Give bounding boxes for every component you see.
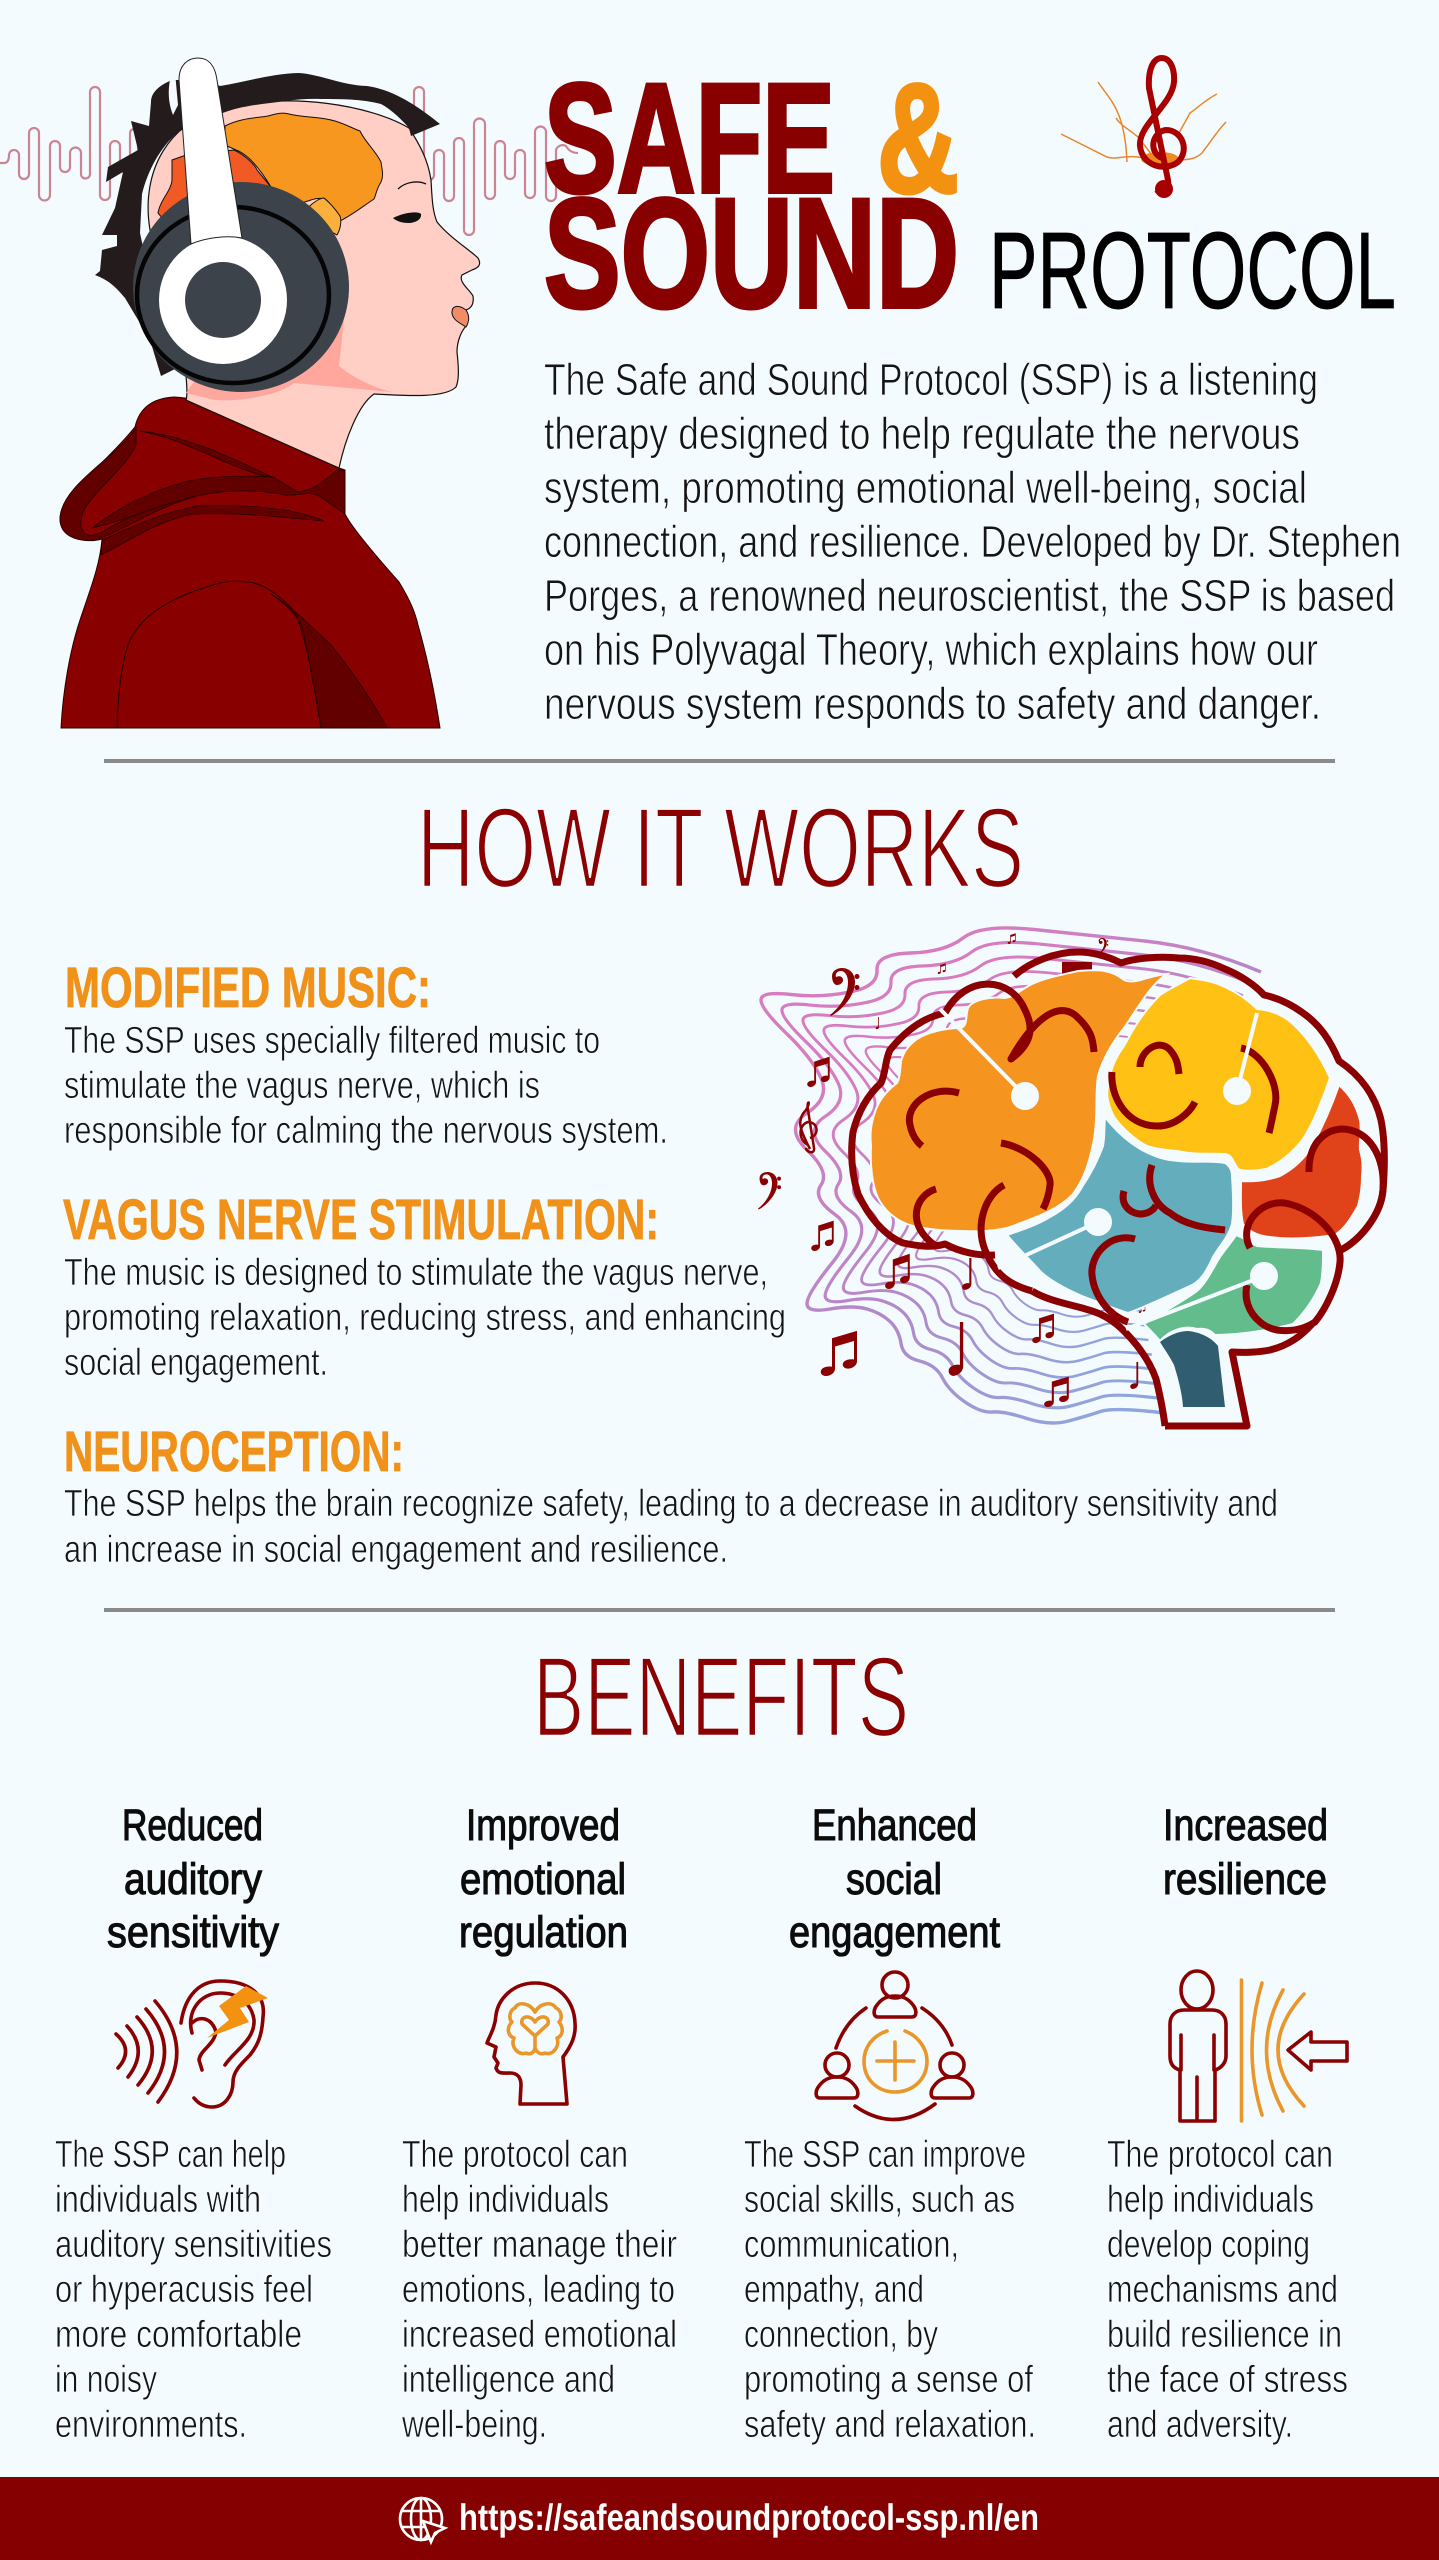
benefit title: sensitivity: [107, 1908, 279, 1957]
icon: treble clef with wires: [1061, 58, 1226, 198]
brain connector nodes: [940, 1009, 1276, 1329]
headband: [179, 58, 242, 244]
brain regions: [871, 970, 1363, 1407]
benefit description: social skills, such as: [744, 2179, 1015, 2221]
text block: vagus nerve stimulation: The music is designed to stimulate the vagus nerve,: [64, 1252, 768, 1294]
benefit description: auditory sensitivities: [55, 2224, 332, 2266]
benefit description: or hyperacusis feel: [55, 2269, 313, 2311]
benefit title: Enhanced: [812, 1801, 977, 1850]
panel: reduced auditory sensitivity: [55, 1801, 332, 2446]
music wave lines: [761, 928, 1261, 1423]
text block: vagus nerve stimulation: [63, 1188, 786, 1384]
text block: modified music: responsible for calming the nervous system.: [64, 1110, 668, 1152]
icon: head with brain and heart: [487, 1983, 575, 2104]
benefit description: [1107, 2134, 1348, 2446]
intro paragraph: [544, 354, 1401, 729]
benefit title: Reduced: [122, 1801, 263, 1850]
text block: modified music: stimulate the vagus nerve, which is: [64, 1065, 540, 1107]
panel: enhanced social engagement: [744, 1801, 1036, 2446]
benefit description: intelligence and: [402, 2359, 615, 2401]
benefit title: regulation: [459, 1908, 628, 1957]
footer bar: [0, 2477, 1439, 2560]
benefit description: better manage their: [402, 2224, 677, 2266]
benefit description: The SSP can help: [55, 2134, 286, 2176]
benefit description: environments.: [55, 2404, 247, 2446]
icon: globe with cursor: [400, 2498, 445, 2542]
benefit description: in noisy: [55, 2359, 157, 2401]
benefit description: The SSP can improve: [744, 2134, 1026, 2176]
benefit description: more comfortable: [55, 2314, 302, 2356]
benefit title: [1163, 1801, 1328, 1904]
icon: ear with sound waves and lightning: [116, 1981, 268, 2107]
intro paragraph: therapy designed to help regulate the nervous: [544, 408, 1300, 459]
benefit title: Increased: [1163, 1801, 1328, 1850]
benefit title: [789, 1801, 1000, 1957]
benefit title: resilience: [1163, 1855, 1327, 1904]
benefit description: build resilience in: [1107, 2314, 1342, 2356]
benefit description: The protocol can: [402, 2134, 628, 2176]
benefit description: mechanisms and: [1107, 2269, 1338, 2311]
benefit title: Improved: [466, 1801, 620, 1850]
brain in head: [158, 113, 383, 240]
hair highlight: [169, 72, 178, 115]
benefit title: [107, 1801, 279, 1957]
hoodie: [60, 397, 440, 728]
icon: person shielded from arrow: [1170, 1971, 1347, 2121]
benefit description: and adversity.: [1107, 2404, 1293, 2446]
illustration: person with headphones: [60, 58, 480, 728]
benefit description: connection, by: [744, 2314, 938, 2356]
benefit description: increased emotional: [402, 2314, 677, 2356]
icon: three people around a plus: [816, 1972, 973, 2120]
brain sulci: [909, 984, 1383, 1331]
text block: modified music: The SSP uses specially filtered music to: [64, 1020, 600, 1062]
benefit description: communication,: [744, 2224, 959, 2266]
ear cup: [133, 182, 349, 392]
music notes: [758, 933, 1145, 1407]
sound wave behind head: [0, 87, 578, 235]
eye and brow: [393, 182, 426, 223]
panel: increased resilience: [1107, 1801, 1348, 2446]
benefit description: the face of stress: [1107, 2359, 1348, 2401]
benefit description: [744, 2134, 1036, 2446]
text block: neuroception: an increase in social engagement and resilience.: [64, 1529, 728, 1571]
title word: SAFE: SAFE: [544, 52, 835, 226]
benefit description: promoting a sense of: [744, 2359, 1033, 2401]
title ampersand: &: [877, 52, 959, 226]
neck shadow: [186, 320, 392, 400]
heading: benefits: BENEFITS: [533, 1634, 909, 1761]
text block: vagus nerve stimulation: promoting relaxation, reducing stress, and enhancing: [64, 1297, 786, 1339]
title: [544, 52, 1396, 341]
benefit title: auditory: [124, 1855, 262, 1904]
benefit description: safety and relaxation.: [744, 2404, 1036, 2446]
hair: [95, 73, 440, 376]
benefit description: [401, 2134, 677, 2446]
website url: https://safeandsoundprotocol-ssp.nl/en: [459, 2497, 1039, 2538]
benefit title: emotional: [460, 1855, 626, 1904]
illustration: brain with music waves: [758, 928, 1384, 1426]
panel: improved emotional regulation: [401, 1801, 677, 2446]
benefit title: social: [846, 1855, 942, 1904]
subheading: neuroception: NEUROCEPTION:: [64, 1420, 404, 1484]
benefit description: develop coping: [1107, 2224, 1310, 2266]
head and neck: [148, 101, 480, 468]
benefit description: empathy, and: [744, 2269, 924, 2311]
subheading: modified music: MODIFIED MUSIC:: [65, 956, 431, 1020]
benefit description: [55, 2134, 332, 2446]
text block: vagus nerve stimulation: social engagement.: [64, 1342, 328, 1384]
benefit description: help individuals: [1107, 2179, 1314, 2221]
brain outline: [852, 952, 1384, 1426]
heading: how it works: HOW IT WORKS: [417, 785, 1024, 912]
benefit description: emotions, leading to: [402, 2269, 675, 2311]
benefit description: help individuals: [402, 2179, 609, 2221]
benefit description: well-being.: [401, 2404, 547, 2446]
lips: [452, 306, 469, 327]
benefit title: engagement: [789, 1908, 1000, 1957]
title word: SOUND: SOUND: [544, 167, 959, 341]
text block: modified music: [64, 956, 668, 1152]
benefit title: [459, 1801, 628, 1957]
benefit description: The protocol can: [1107, 2134, 1333, 2176]
benefit description: individuals with: [55, 2179, 261, 2221]
subheading: vagus nerve stimulation: VAGUS NERVE STIMULATION:: [63, 1188, 659, 1252]
text block: neuroception: [64, 1420, 1278, 1571]
